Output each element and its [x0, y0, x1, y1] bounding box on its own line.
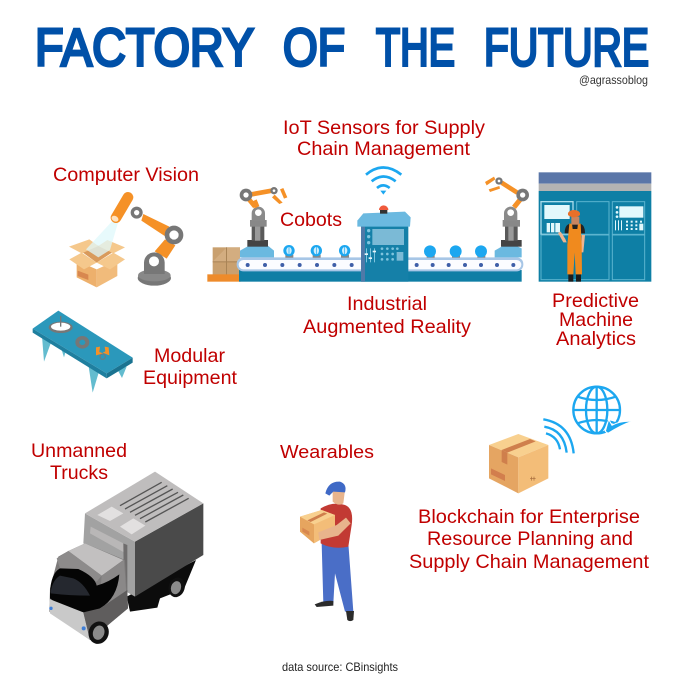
- icon: computer vision robot and box: [69, 197, 183, 287]
- heading: blockchain: Resource Planning and: [427, 528, 633, 550]
- light beam: [86, 221, 118, 257]
- title: OF: [283, 18, 345, 78]
- heading: blockchain: Supply Chain Management: [409, 551, 650, 573]
- author handle: @agrassoblog: [579, 73, 648, 87]
- box: [69, 239, 125, 287]
- heading: IoT sensors: IoT Sensors for Supply: [283, 117, 485, 139]
- heading: modular equipment: [143, 345, 238, 389]
- robot arm: [110, 197, 183, 286]
- illustration: unmanned truck: [49, 472, 203, 647]
- conveyor line illustration: [207, 167, 529, 282]
- heading: predictive machine analytics: Analytics: [556, 328, 636, 350]
- data source note: data source: CBinsights: [282, 660, 398, 674]
- icon: modular equipment table: [33, 311, 133, 393]
- conveyor belt: [237, 257, 523, 282]
- heading: modular equipment: Equipment: [143, 367, 238, 389]
- heading: industrial augmented reality: Industrial: [347, 293, 427, 315]
- items on belt: patterned: [283, 245, 350, 258]
- front wheel: [86, 619, 112, 647]
- illustration: parcel with wireless signal and globe: [489, 387, 632, 493]
- cab: [49, 543, 128, 640]
- heading: computer vision: Computer Vision: [53, 164, 199, 186]
- items on belt: solid: [424, 245, 487, 258]
- illustration: delivery worker: [300, 482, 354, 621]
- heading: unmanned trucks: [31, 440, 127, 484]
- heading: unmanned trucks: Unmanned: [31, 440, 127, 462]
- icon: wifi signal: [366, 167, 401, 195]
- control cabinet: [357, 205, 411, 282]
- globe with check mark: [573, 387, 632, 433]
- heading: blockchain: [409, 506, 650, 573]
- title: THE: [376, 18, 455, 78]
- heading: industrial augmented reality: Augmented Reality: [303, 316, 471, 338]
- cargo box: [83, 472, 203, 597]
- heading: blockchain: Blockchain for Enterprise: [418, 506, 640, 528]
- title: FACTORY: [35, 18, 254, 78]
- operator: [558, 210, 585, 282]
- machine panels: [541, 202, 645, 280]
- title: [35, 18, 649, 78]
- parcel: [489, 434, 548, 493]
- heading: modular equipment: Modular: [154, 345, 226, 367]
- wireless waves: [543, 419, 574, 453]
- illustration: predictive machine with operator: [539, 172, 651, 282]
- heading: predictive machine analytics: Predictive: [552, 290, 639, 312]
- heading: industrial augmented reality: [303, 293, 471, 338]
- left robot: [240, 187, 287, 257]
- right robot: [485, 177, 529, 257]
- heading: predictive machine analytics: Machine: [559, 309, 633, 331]
- heading: IoT sensors: [283, 117, 485, 160]
- rear wheel: [166, 575, 187, 599]
- screens and controls: [544, 205, 643, 232]
- cardboard boxes: [207, 247, 241, 282]
- heading: wearables: Wearables: [280, 441, 374, 462]
- heading: cobots: Cobots: [280, 209, 342, 231]
- heading: unmanned trucks: Trucks: [50, 462, 108, 484]
- heading: predictive machine analytics: [552, 290, 639, 350]
- heading: IoT sensors: Chain Management: [297, 138, 471, 160]
